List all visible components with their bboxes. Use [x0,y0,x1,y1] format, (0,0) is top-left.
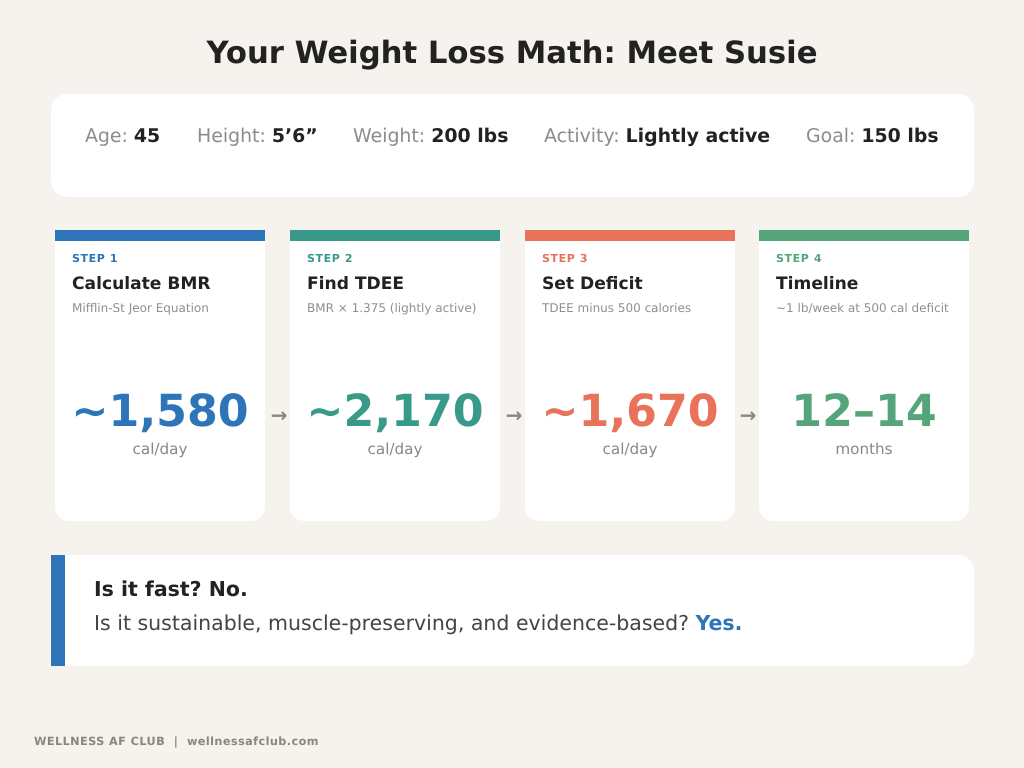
step 1 color bar [55,230,265,241]
panel: conclusion callout [51,555,974,666]
callout accent bar [51,555,65,666]
stat: height: Height: 5’6” [197,125,318,147]
stat: weight: Weight: 200 lbs [353,125,508,147]
step 3 description: TDEE minus 500 calories [542,300,691,314]
panel: step 4 card [759,230,969,521]
step 1 unit: cal/day [133,440,187,458]
step 3 color bar [525,230,735,241]
arrow: step 1 to step 2: → [271,403,287,427]
step 3 heading: Set Deficit [542,274,643,294]
footer: WELLNESS AF CLUB | wellnessafclub.com [34,735,319,748]
step 2 label: STEP 2 [307,252,353,265]
step 4 color bar [759,230,969,241]
callout answer: Is it sustainable, muscle-preserving, and evidence-based? Yes. [94,611,742,635]
callout question: Is it fast? No. [94,577,248,601]
panel: step 3 card [525,230,735,521]
step 2 heading: Find TDEE [307,274,404,294]
step 1 heading: Calculate BMR [72,274,211,294]
step 4 heading: Timeline [776,274,858,294]
step 2 color bar [290,230,500,241]
stat: goal: Goal: 150 lbs [806,125,939,147]
panel: step 2 card [290,230,500,521]
panel: step 1 card [55,230,265,521]
step 3 label: STEP 3 [542,252,588,265]
step 4 label: STEP 4 [776,252,822,265]
title: Your Weight Loss Math: Meet Susie [206,36,818,70]
step 1 value: ~1,580 [71,386,249,437]
step 3 value: ~1,670 [541,386,719,437]
step 1 description: Mifflin-St Jeor Equation [72,300,209,314]
step 2 value: ~2,170 [306,386,484,437]
step 4 value: 12–14 [791,386,937,437]
step 1 label: STEP 1 [72,252,118,265]
step 4 unit: months [835,440,893,458]
stat: age: Age: 45 [85,125,160,147]
arrow: step 3 to step 4: → [740,403,756,427]
stat: activity: Activity: Lightly active [544,125,770,147]
arrow: step 2 to step 3: → [506,403,522,427]
step 2 unit: cal/day [368,440,422,458]
step 4 description: ~1 lb/week at 500 cal deficit [776,300,949,314]
step 3 unit: cal/day [603,440,657,458]
step 2 description: BMR × 1.375 (lightly active) [307,300,476,314]
panel: profile stats [51,94,974,197]
